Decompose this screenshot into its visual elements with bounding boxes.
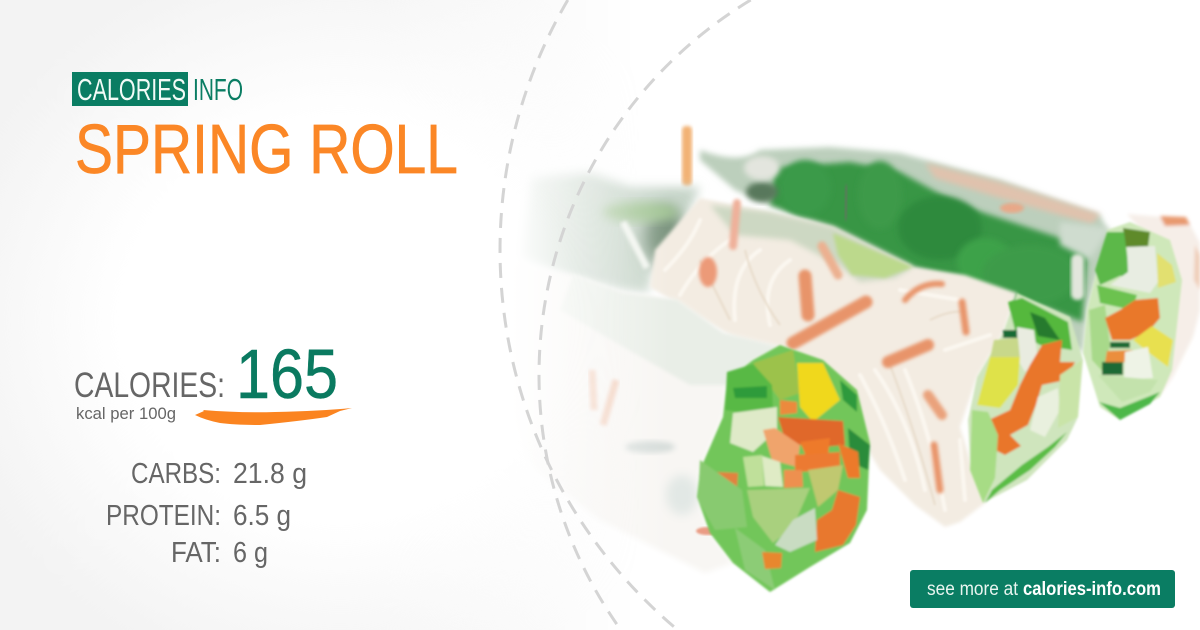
stray carrot stick <box>682 126 692 186</box>
middle roll left translucent part <box>520 173 700 293</box>
unit note: kcal per 100g <box>76 404 176 423</box>
calories value: 165 <box>236 335 338 413</box>
dashed arc: outer <box>500 0 678 630</box>
background edge vignette <box>0 0 434 630</box>
dashed arc: inner <box>539 0 751 630</box>
middle roll cut end <box>968 293 1083 503</box>
back roll <box>700 147 1200 420</box>
call to action button: calories-info.com <box>1023 579 1161 600</box>
logo word calories: CALORIES <box>77 72 186 107</box>
call to action button: see more at <box>927 579 1019 600</box>
carbs row: CARBS: <box>131 458 221 490</box>
front roll wrapper <box>505 262 780 573</box>
calories block <box>74 335 352 425</box>
middle roll body <box>650 198 1017 527</box>
back roll body <box>700 147 1110 353</box>
logo word info: INFO <box>193 72 243 107</box>
back roll wrapper right <box>1127 214 1200 395</box>
carbs row: 21.8 g <box>233 458 307 490</box>
logo badge <box>72 72 188 106</box>
fat row: FAT: <box>171 537 221 569</box>
call to action button <box>910 570 1175 608</box>
nutrient list <box>106 458 307 569</box>
fat row <box>171 537 268 569</box>
left fade of photo <box>470 140 670 630</box>
spring rolls photo <box>470 126 1200 630</box>
protein row: PROTEIN: <box>106 500 221 532</box>
title: SPRING ROLL <box>75 110 458 188</box>
back roll cut end <box>1083 222 1182 420</box>
fat row: 6 g <box>233 537 268 569</box>
logo <box>72 72 243 107</box>
calories label: CALORIES: <box>74 366 225 405</box>
orange brush underline <box>195 408 352 425</box>
middle roll <box>650 198 1083 527</box>
carbs row <box>131 458 307 490</box>
front roll cut end <box>697 345 870 592</box>
protein row: 6.5 g <box>233 500 291 532</box>
front roll <box>505 262 870 592</box>
